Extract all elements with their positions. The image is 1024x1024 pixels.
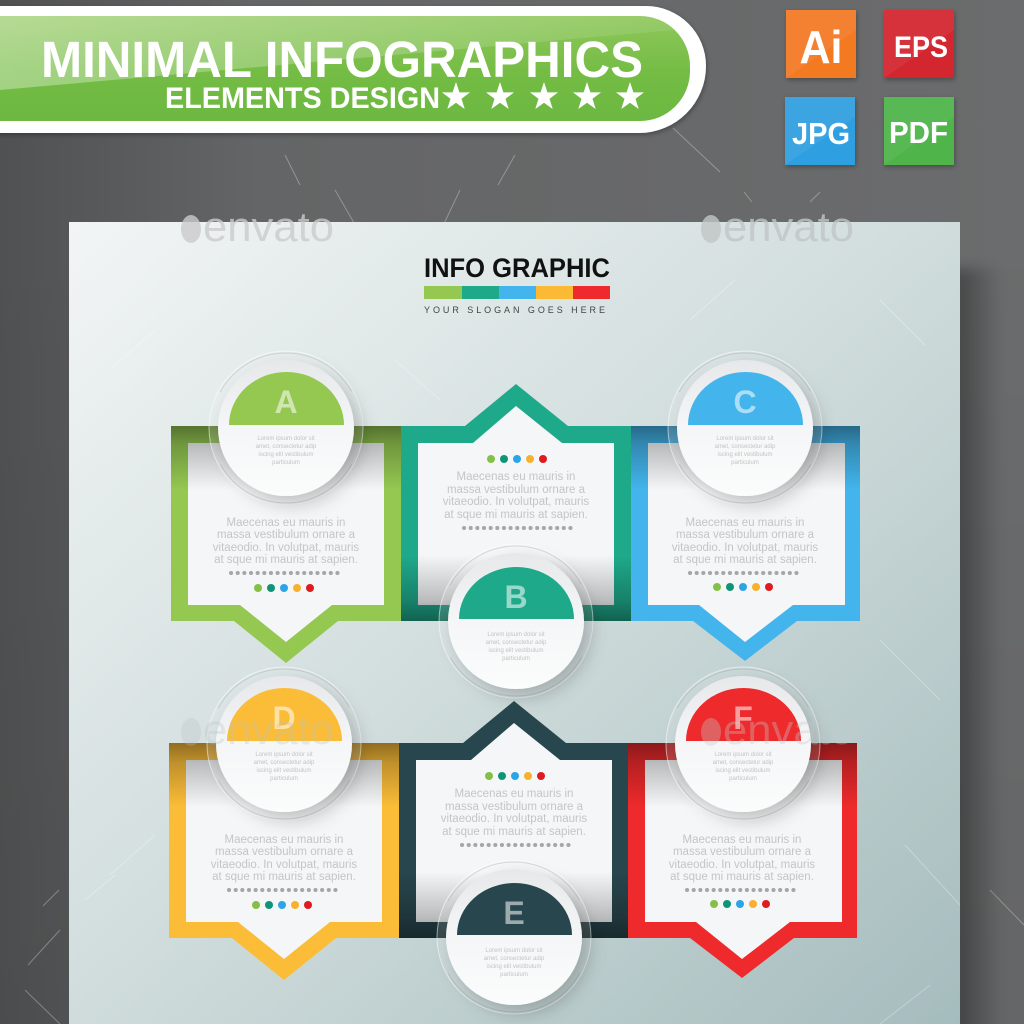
circle text F: iscing elit vestibulum	[715, 768, 771, 774]
watermark: envato lower right: envato	[723, 706, 854, 753]
panel: card F	[628, 743, 857, 978]
panel: card A	[171, 426, 401, 663]
text E	[441, 788, 587, 838]
panel: card E	[399, 701, 629, 938]
badge circle B	[439, 544, 593, 698]
frame C	[631, 426, 860, 661]
circle text A	[256, 436, 317, 466]
circle text D: amet, consectetur adip	[254, 760, 315, 766]
heading: info graphic	[424, 253, 610, 315]
circle text D: Lorem ipsum dolor sit	[255, 752, 313, 758]
circle text E	[484, 948, 545, 978]
text C: massa vestibulum ornare a	[676, 529, 815, 541]
badge: PDF	[884, 97, 954, 165]
badge circle D	[207, 667, 361, 821]
dots F	[710, 900, 770, 908]
inner F	[645, 760, 842, 959]
badge circle A: A	[274, 384, 298, 420]
panel: card C	[631, 426, 860, 661]
text A: massa vestibulum ornare a	[217, 529, 356, 541]
text D: massa vestibulum ornare a	[215, 846, 354, 858]
text C: vitaeodio. In volutpat, mauris	[672, 542, 818, 554]
dots C	[713, 583, 773, 591]
badge circle C	[668, 351, 822, 505]
frame E	[399, 701, 629, 938]
text A: vitaeodio. In volutpat, mauris	[213, 542, 359, 554]
colour bar	[424, 286, 610, 299]
circle text C: iscing elit vestibulum	[717, 452, 773, 458]
circle text B: Lorem ipsum dolor sit	[487, 632, 545, 638]
inner B	[418, 406, 614, 605]
circle text A: Lorem ipsum dolor sit	[257, 436, 315, 442]
badge: JPG: JPG	[792, 116, 850, 151]
circle text E: Lorem ipsum dolor sit	[485, 948, 543, 954]
text B	[443, 471, 589, 521]
circle text A: amet, consectetur adip	[256, 444, 317, 450]
subtitle text: ELEMENTS DESIGN	[165, 82, 440, 115]
watermark: envato top left: envato	[203, 203, 334, 250]
circle text D: particulum	[270, 776, 298, 782]
panel: card B	[401, 384, 631, 621]
badge: Ai: Ai	[800, 21, 842, 73]
text A: Maecenas eu mauris in	[227, 517, 345, 529]
badge circle D: D	[272, 700, 296, 736]
circle text B	[486, 632, 547, 662]
rating stars	[442, 82, 644, 109]
badge circle F: F	[733, 700, 753, 736]
inner E	[416, 723, 612, 922]
text F: Maecenas eu mauris in	[683, 834, 801, 846]
circle text F: particulum	[729, 776, 757, 782]
dots B	[487, 455, 547, 463]
circle text C: Lorem ipsum dolor sit	[716, 436, 774, 442]
badge: EPS	[884, 10, 954, 78]
text C: at sque mi mauris at sapien.	[673, 554, 817, 566]
badge circle B: B	[504, 579, 528, 615]
title banner	[0, 6, 706, 133]
circle text E: particulum	[500, 972, 528, 978]
badge circle E	[437, 860, 591, 1014]
badge circle C: C	[733, 384, 757, 420]
text E: massa vestibulum ornare a	[445, 801, 584, 813]
panel: card D	[169, 743, 399, 980]
badge: PDF: PDF	[889, 115, 948, 150]
text F: massa vestibulum ornare a	[673, 846, 812, 858]
frame B	[401, 384, 631, 621]
text B: massa vestibulum ornare a	[447, 484, 586, 496]
badge: EPS: EPS	[894, 31, 948, 64]
text D: at sque mi mauris at sapien.	[212, 871, 356, 883]
text B: Maecenas eu mauris in	[457, 471, 575, 483]
badge: JPG	[785, 97, 855, 165]
text B: vitaeodio. In volutpat, mauris	[443, 496, 589, 508]
circle text D: iscing elit vestibulum	[256, 768, 312, 774]
text E: vitaeodio. In volutpat, mauris	[441, 813, 587, 825]
circle text B: particulum	[502, 656, 530, 662]
inner A	[188, 443, 384, 642]
badge circle A	[209, 351, 363, 505]
badge: Ai	[786, 10, 856, 78]
circle text B: amet, consectetur adip	[486, 640, 547, 646]
circle text C	[715, 436, 776, 466]
circle text C: particulum	[731, 460, 759, 466]
panel shadow	[950, 268, 1002, 1024]
circle text F: Lorem ipsum dolor sit	[714, 752, 772, 758]
frame D	[169, 743, 399, 980]
watermark: envato lower left: envato	[203, 706, 334, 753]
inner C	[648, 443, 845, 642]
inner D	[186, 760, 382, 959]
text D: Maecenas eu mauris in	[225, 834, 343, 846]
badge circle E: E	[503, 895, 525, 931]
dots E	[485, 772, 545, 780]
circle text E: amet, consectetur adip	[484, 956, 545, 962]
dots A	[254, 584, 314, 592]
text A	[213, 517, 359, 566]
slogan: YOUR SLOGAN GOES HERE	[424, 305, 605, 315]
text E: at sque mi mauris at sapien.	[442, 826, 586, 838]
watermark: envato top right: envato	[723, 203, 854, 250]
heading: info graphic: INFO GRAPHIC	[424, 253, 610, 283]
circle text F: amet, consectetur adip	[713, 760, 774, 766]
circle text E: iscing elit vestibulum	[486, 964, 542, 970]
text E: Maecenas eu mauris in	[455, 788, 573, 800]
text C: Maecenas eu mauris in	[686, 517, 804, 529]
main panel	[69, 222, 960, 1024]
main title text: MINIMAL INFOGRAPHICS	[41, 31, 643, 88]
circle text B: iscing elit vestibulum	[488, 648, 544, 654]
text F	[669, 834, 815, 883]
text D: vitaeodio. In volutpat, mauris	[211, 859, 357, 871]
frame F	[628, 743, 857, 978]
text F: at sque mi mauris at sapien.	[670, 871, 814, 883]
text A: at sque mi mauris at sapien.	[214, 554, 358, 566]
text F: vitaeodio. In volutpat, mauris	[669, 859, 815, 871]
circle text C: amet, consectetur adip	[715, 444, 776, 450]
text C	[672, 517, 818, 566]
circle text A: iscing elit vestibulum	[258, 452, 314, 458]
frame A	[171, 426, 401, 663]
circle text A: particulum	[272, 460, 300, 466]
text D	[211, 834, 357, 883]
circle text D	[254, 752, 315, 782]
circle text F	[713, 752, 774, 782]
badge circle F	[666, 667, 820, 821]
dots D	[252, 901, 312, 909]
text B: at sque mi mauris at sapien.	[444, 509, 588, 521]
